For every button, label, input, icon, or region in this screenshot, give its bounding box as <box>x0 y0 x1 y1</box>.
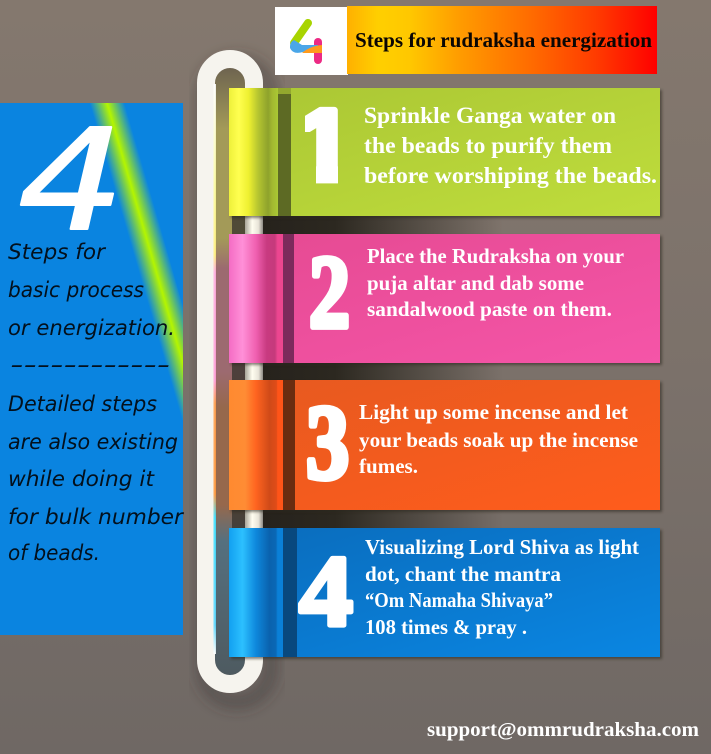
step 4 text: 108 times & pray . <box>365 615 527 639</box>
left blue panel <box>0 103 184 635</box>
step 3 text <box>359 400 638 478</box>
logo box <box>275 7 348 75</box>
step card 2 <box>229 234 662 365</box>
title banner: Steps for rudraksha energization <box>355 28 652 52</box>
step 2 text <box>367 244 624 321</box>
step 4 text <box>365 535 639 639</box>
step 3 text: your beads soak up the incense <box>359 428 638 452</box>
numeral 3: 3 <box>306 384 349 501</box>
step 2 text: sandalwood paste on them. <box>367 297 612 321</box>
left panel text: basic process <box>8 278 144 302</box>
step 2 text: puja altar and dab some <box>367 271 584 295</box>
footer email: support@ommrudraksha.com <box>427 719 699 741</box>
numeral 2: 2 <box>309 236 350 350</box>
step 3 text: Light up some incense and let <box>359 400 628 424</box>
step 1 text: the beads to purify them <box>364 133 612 158</box>
shadow bands between cards <box>232 216 503 528</box>
left panel text: for bulk number <box>8 505 184 529</box>
left panel text: of beads. <box>8 541 100 565</box>
diagonal stripe <box>90 103 183 420</box>
left panel text: Steps for <box>8 240 106 264</box>
step 1 text <box>364 103 657 188</box>
left panel text: while doing it <box>8 467 155 491</box>
numeral 1: 1 <box>295 88 354 201</box>
left panel text: or energization. <box>8 316 175 340</box>
left panel text <box>8 240 184 565</box>
step 1 text: Sprinkle Ganga water on <box>364 103 616 128</box>
step 4 text: “Om Namaha Shivaya” <box>365 588 553 612</box>
step 3 text: fumes. <box>359 454 418 478</box>
step 4 text: Visualizing Lord Shiva as light <box>365 535 639 559</box>
step 1 text: before worshiping the beads. <box>364 163 657 188</box>
step 4 text: dot, chant the mantra <box>365 562 561 586</box>
numeral 4: 4 <box>299 535 353 647</box>
step card 1 <box>229 88 662 218</box>
step 2 text: Place the Rudraksha on your <box>367 244 624 268</box>
title banner <box>275 6 657 75</box>
big numeral 4: 4 <box>18 100 125 262</box>
step card 4 <box>229 528 662 659</box>
left panel text: are also existing <box>8 430 178 454</box>
pipe rail frame <box>203 59 271 702</box>
left panel text: Detailed steps <box>8 392 157 416</box>
left panel text: ------------ <box>10 353 170 377</box>
step card 3 <box>229 380 662 512</box>
